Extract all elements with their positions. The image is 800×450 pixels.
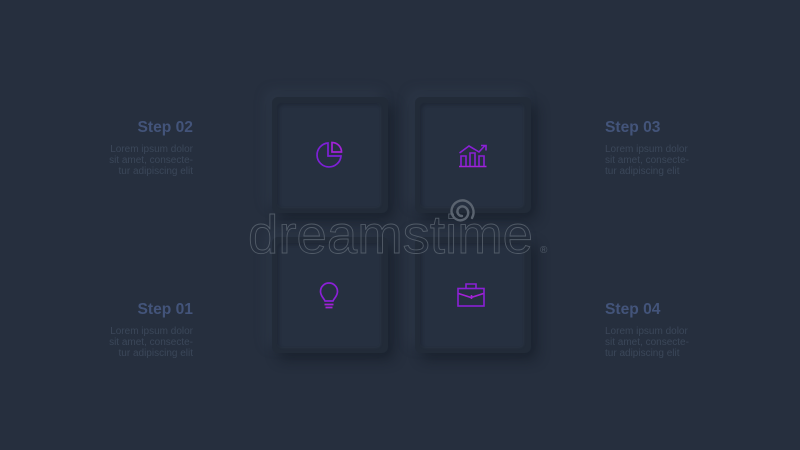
step 01 text: Step 01 <box>138 301 193 318</box>
icon: growth bar chart <box>459 146 486 166</box>
step 02 text: Lorem ipsum dolor <box>110 144 193 155</box>
step 04 text: tur adipiscing elit <box>605 348 679 359</box>
step 04 text: Step 04 <box>605 301 660 318</box>
icon: pie chart <box>317 142 342 167</box>
watermark: registered mark: ® <box>540 245 548 256</box>
step 04 text <box>605 301 689 359</box>
step 01 text: tur adipiscing elit <box>119 348 193 359</box>
step 02 text: sit amet, consecte- <box>109 155 193 166</box>
step 03 text: Step 03 <box>605 119 660 136</box>
step 02 text <box>109 119 193 177</box>
step 02 text: tur adipiscing elit <box>119 166 193 177</box>
card: bottom right <box>415 237 531 353</box>
icon: light bulb <box>320 283 338 308</box>
card: top right <box>415 97 531 213</box>
watermark: dreamstime wordmark: dreamstime <box>248 205 533 265</box>
step 03 text: Lorem ipsum dolor <box>605 144 688 155</box>
step 03 text: tur adipiscing elit <box>605 166 679 177</box>
step 01 text: sit amet, consecte- <box>109 337 193 348</box>
step 01 text: Lorem ipsum dolor <box>110 326 193 337</box>
step 01 text <box>109 301 193 359</box>
card: bottom left <box>272 237 388 353</box>
step 04 text: sit amet, consecte- <box>605 337 689 348</box>
step 02 text: Step 02 <box>138 119 193 136</box>
icon: briefcase <box>458 284 484 306</box>
step 03 text: sit amet, consecte- <box>605 155 689 166</box>
card: top left <box>272 97 388 213</box>
step 03 text <box>605 119 689 177</box>
watermark: spiral logo <box>452 200 474 220</box>
step 04 text: Lorem ipsum dolor <box>605 326 688 337</box>
